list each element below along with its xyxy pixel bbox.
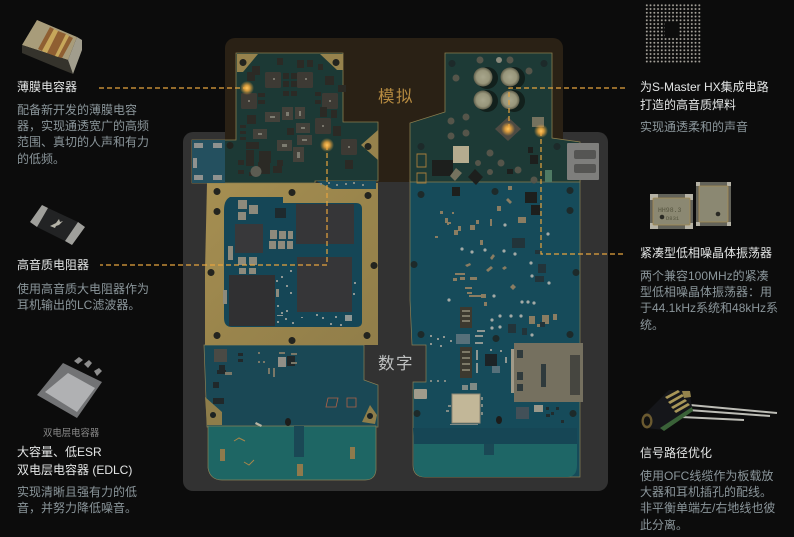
board: USB tab section xyxy=(192,140,225,183)
body xyxy=(640,468,775,532)
body: 音，并努力降低噪音。 xyxy=(17,501,137,515)
icon: headphone jack with wires xyxy=(642,390,777,431)
capacitor shadows xyxy=(476,67,525,112)
flat connector and parts xyxy=(432,147,540,215)
icon: BGA solder balls xyxy=(645,3,701,63)
board: digital teal section xyxy=(410,180,580,477)
text block: resistor xyxy=(17,258,149,312)
SD card slot xyxy=(511,343,583,402)
inductor dots xyxy=(248,78,350,148)
board: left lower section xyxy=(204,345,378,427)
board: left analog section xyxy=(192,53,378,183)
shield window small parts xyxy=(223,200,293,304)
body: 耳机输出的LC滤波器。 xyxy=(17,298,140,312)
amplifier chip xyxy=(495,117,521,141)
body xyxy=(17,282,149,312)
gold mounting blobs xyxy=(205,397,377,425)
leader: thin-film capacitor xyxy=(99,87,247,89)
body: 两个兼容100MHz的紧凑 xyxy=(640,268,769,282)
heading: 为S-Master HX集成电路 xyxy=(640,80,769,94)
heading: analog label: 模拟 xyxy=(378,88,414,106)
text block: signal path xyxy=(640,446,775,532)
bottom right chips xyxy=(516,407,529,419)
USB-C connector xyxy=(567,143,599,180)
body: 大器和耳机插孔的配线。 xyxy=(640,485,772,499)
oscillator module xyxy=(414,389,427,399)
scattered digital parts xyxy=(435,186,557,327)
board: lower-right shade xyxy=(413,428,577,444)
body: 配备新开发的薄膜电容 xyxy=(17,102,137,116)
text block: oscillator xyxy=(640,246,778,332)
heading: 紧凑型低相噪晶体振荡器 xyxy=(640,246,772,260)
USB tab pads xyxy=(193,143,222,180)
body: 统。 xyxy=(640,318,664,332)
icon: crystal oscillators: D831 xyxy=(666,215,680,222)
left circuit board xyxy=(192,53,378,480)
board: bottom teal strip xyxy=(414,444,577,477)
leader lines xyxy=(99,88,626,265)
body xyxy=(640,268,778,332)
inductors xyxy=(241,72,357,155)
large memory chips xyxy=(229,204,354,326)
glow markers xyxy=(240,81,548,152)
right circuit board xyxy=(410,53,599,477)
silver vias xyxy=(447,223,551,337)
mounting holes xyxy=(208,59,378,344)
heading: 大容量、低ESR xyxy=(17,445,102,459)
body: 此分离。 xyxy=(640,518,688,532)
mounting holes xyxy=(411,60,580,417)
body: 使用OFC线缆作为板载放 xyxy=(640,468,773,482)
capacitor highlights xyxy=(258,111,307,158)
icon: crystal oscillators: HH98.3 xyxy=(658,207,682,214)
gold corner pads xyxy=(237,54,378,160)
board: gold shield frame xyxy=(205,183,378,345)
text block: thin-film capacitor xyxy=(17,80,149,166)
film capacitors xyxy=(253,107,312,162)
caption: EDLC: 双电层电容器 xyxy=(43,427,99,438)
leader: oscillator xyxy=(541,131,626,254)
text block: EDLC xyxy=(17,445,137,515)
body: 范围、真切的人声和有力 xyxy=(17,135,149,149)
white connector xyxy=(453,146,469,163)
icon: resistor xyxy=(30,205,85,245)
board: shield window xyxy=(224,197,362,327)
leader: solder xyxy=(509,88,626,129)
heading: 打造的高音质焊料 xyxy=(640,98,736,112)
body xyxy=(17,102,149,166)
body xyxy=(17,485,137,515)
body: 实现通透柔和的声音 xyxy=(640,120,748,134)
body: 器，实现通透宽广的高频 xyxy=(17,119,149,133)
board: analog green section xyxy=(410,53,580,182)
heading: 薄膜电容器 xyxy=(17,80,77,94)
small chips xyxy=(485,354,497,366)
icon: crystal oscillators xyxy=(650,182,731,229)
icon: thin-film capacitor xyxy=(22,20,82,74)
RF strip parts xyxy=(316,181,376,189)
body: 于44.1kHz系统和48kHz系 xyxy=(640,301,778,315)
silkscreen logos xyxy=(326,398,356,407)
panel: digital backdrop xyxy=(183,132,608,491)
heading xyxy=(640,80,769,112)
heading: 信号路径优化 xyxy=(640,446,712,460)
icon: EDLC capacitor xyxy=(37,357,102,418)
lower section parts xyxy=(214,349,227,362)
board: left bottom teal strip xyxy=(208,426,376,480)
body: 使用高音质大电阻器作为 xyxy=(17,282,149,296)
body: 型低相噪晶体振荡器：用 xyxy=(640,285,772,299)
FPC connectors xyxy=(460,307,472,378)
small analog parts xyxy=(238,58,353,176)
shield can xyxy=(452,394,480,423)
heading: digital label: 数字 xyxy=(378,355,414,373)
heading: 双电层电容器 (EDLC) xyxy=(17,462,132,476)
text block: solder xyxy=(640,80,769,134)
panel: analog backdrop xyxy=(225,38,563,182)
body: 的低频。 xyxy=(17,152,65,166)
bottom strip details xyxy=(294,426,304,457)
heading: 高音质电阻器 xyxy=(17,258,89,272)
silver test pads xyxy=(448,56,538,184)
leader: resistor xyxy=(100,145,327,265)
body: 非平衡单端左/右地线也彼 xyxy=(640,501,775,515)
heading xyxy=(17,445,132,476)
audio capacitors xyxy=(474,68,520,110)
body: 实现清晰且强有力的低 xyxy=(17,485,137,499)
